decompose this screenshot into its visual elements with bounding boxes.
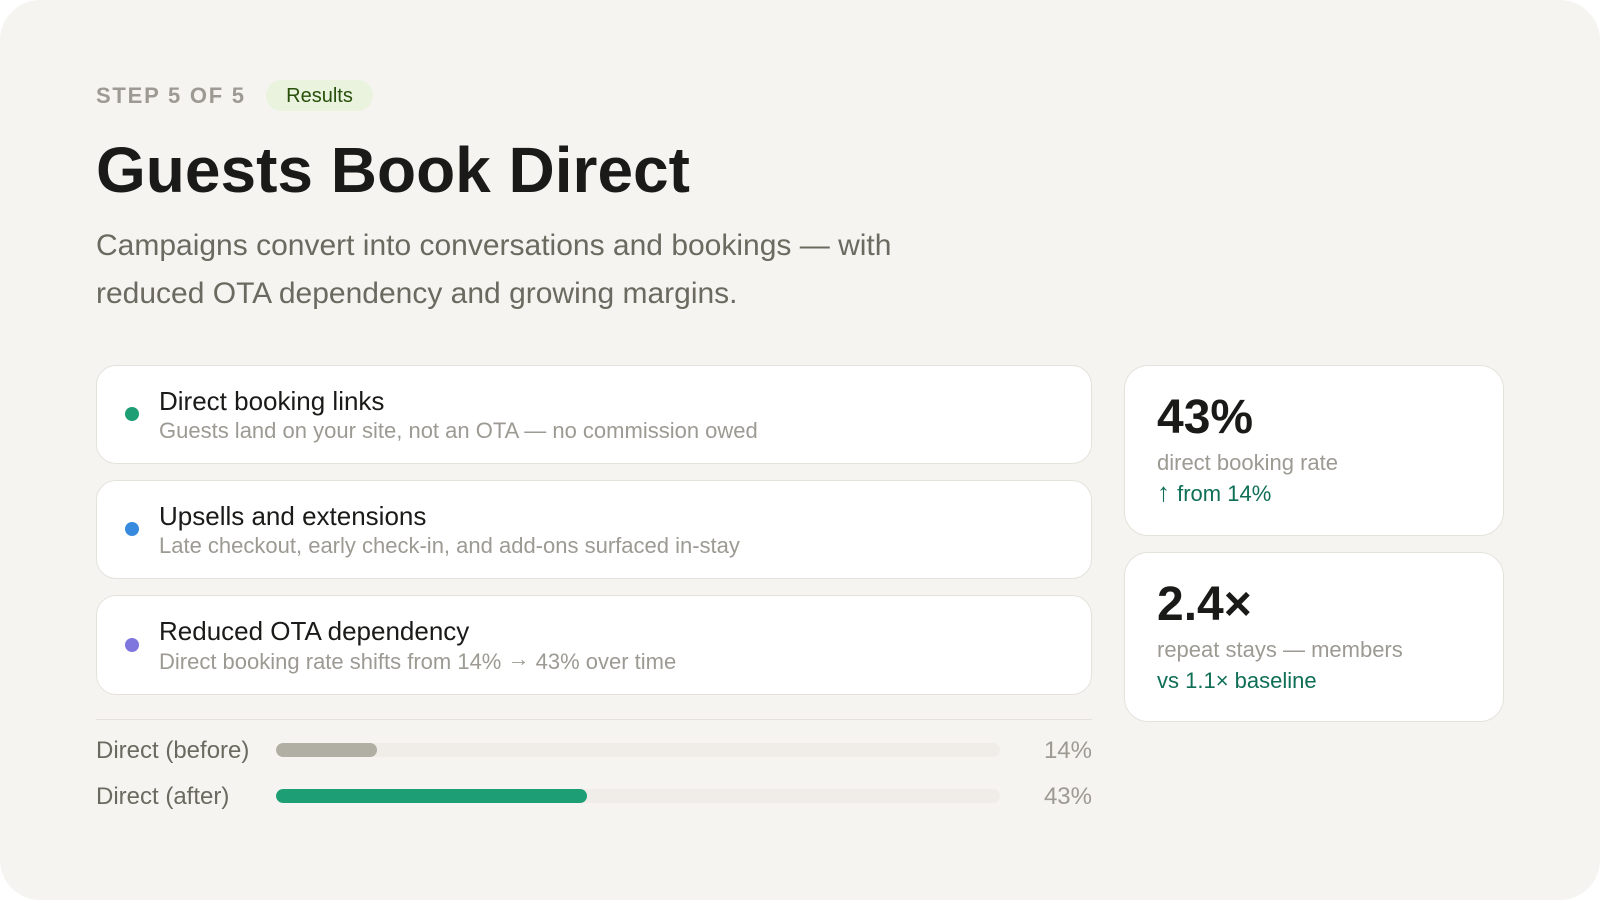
item description: Guests land on your site, not an OTA — no commission owed bbox=[159, 418, 758, 443]
stat note: ↑ bbox=[1157, 477, 1170, 507]
badge: results: Results bbox=[286, 85, 353, 107]
icon: blue dot bbox=[124, 522, 138, 536]
badge: results bbox=[266, 80, 373, 111]
bar track bbox=[276, 743, 1000, 757]
stat card: direct booking rate bbox=[1124, 365, 1504, 536]
icon: green dot bbox=[124, 407, 138, 421]
bar value: 14% bbox=[1044, 737, 1092, 764]
bar row: direct before bbox=[96, 737, 1092, 764]
title: Guests Book Direct bbox=[96, 134, 690, 206]
panel: reduced OTA dependency bbox=[96, 595, 1092, 695]
bar fill 14% bbox=[276, 743, 377, 757]
step label: STEP 5 OF 5 bbox=[96, 83, 246, 108]
stat note bbox=[1157, 477, 1271, 507]
stat number: 43% bbox=[1157, 391, 1253, 444]
bar label: Direct (before) bbox=[96, 737, 249, 764]
bar track bbox=[276, 789, 1000, 803]
item heading: Upsells and extensions bbox=[159, 501, 426, 531]
bar value: 43% bbox=[1044, 783, 1092, 810]
subtitle bbox=[96, 229, 891, 310]
subtitle: reduced OTA dependency and growing margins. bbox=[96, 277, 738, 310]
icon: purple dot bbox=[124, 638, 138, 652]
bar label: Direct (after) bbox=[96, 783, 229, 810]
bar fill 43% bbox=[276, 789, 587, 803]
panel: direct booking links bbox=[96, 365, 1092, 464]
stat note: vs 1.1× baseline bbox=[1157, 668, 1317, 693]
stat note: from 14% bbox=[1177, 481, 1271, 506]
bar row: direct after bbox=[96, 783, 1092, 810]
stat label: direct booking rate bbox=[1157, 450, 1338, 475]
item description: Direct booking rate shifts from 14% → 43% over time bbox=[159, 646, 676, 674]
item description: Late checkout, early check-in, and add-ons surfaced in-stay bbox=[159, 533, 740, 558]
item heading: Reduced OTA dependency bbox=[159, 616, 469, 646]
item heading: Direct booking links bbox=[159, 386, 384, 416]
stat card: repeat stays bbox=[1124, 552, 1504, 722]
stat number: 2.4× bbox=[1157, 578, 1252, 631]
stat label: repeat stays — members bbox=[1157, 637, 1403, 662]
panel: upsells and extensions bbox=[96, 480, 1092, 579]
subtitle: Campaigns convert into conversations and bookings — with bbox=[96, 229, 891, 262]
